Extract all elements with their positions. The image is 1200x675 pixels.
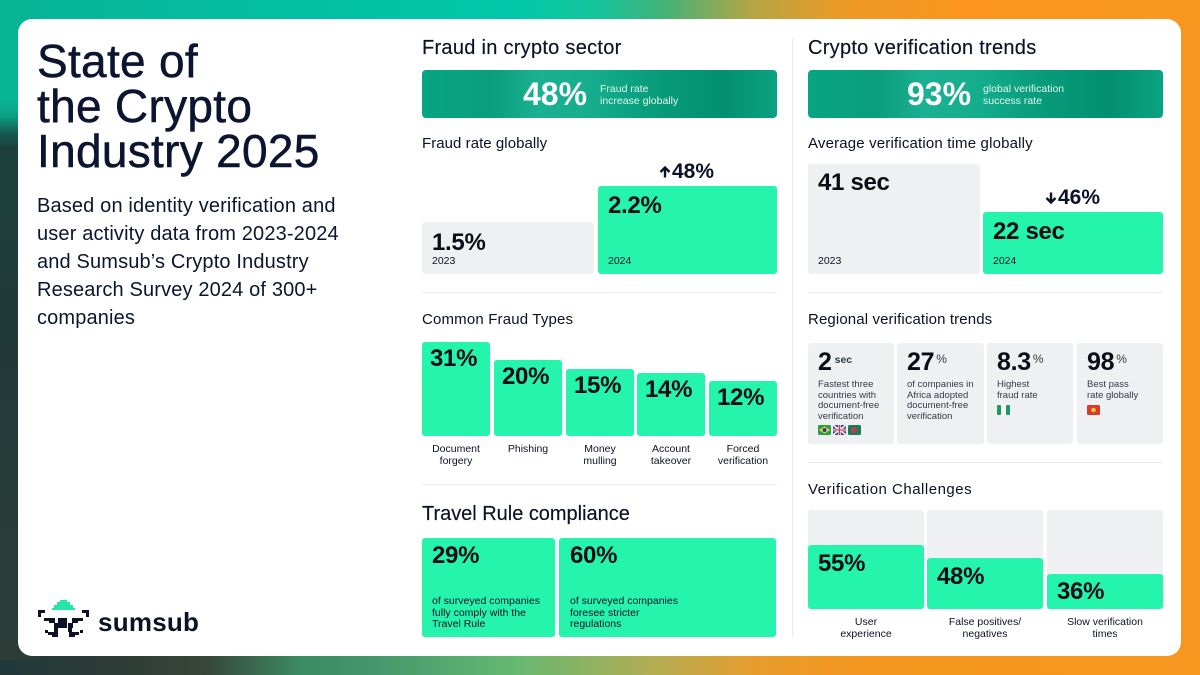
panel: crypto verification trends <box>808 37 1163 274</box>
subheading: Common Fraud Types <box>422 311 573 328</box>
description <box>570 595 678 630</box>
bar: 14% <box>637 373 705 436</box>
title <box>37 35 320 177</box>
value: 29% <box>432 542 479 569</box>
intro text: user activity data from 2023-2024 <box>37 223 339 245</box>
column: slow verification <box>1047 510 1163 609</box>
banner: 93% <box>808 70 1163 118</box>
description <box>997 379 1038 401</box>
fill: 55%: 55% <box>818 550 865 577</box>
description: foresee stricter <box>570 606 639 618</box>
description: verification <box>907 411 952 422</box>
fill: 48% <box>927 558 1043 609</box>
subheading: Fraud rate globally <box>422 135 547 152</box>
bar: 31% <box>422 342 490 436</box>
description: verification <box>818 411 863 422</box>
icon: flag of Vietnam <box>1087 405 1100 415</box>
year: 2023 <box>818 255 841 267</box>
banner value: 48% <box>523 76 587 112</box>
fill: 36%: 36% <box>1057 578 1104 605</box>
banner value: 93% <box>907 76 971 112</box>
label: takeover <box>651 455 691 467</box>
intro text: Based on identity verification and <box>37 195 336 217</box>
banner caption <box>600 83 678 107</box>
year: 2023 <box>432 255 455 267</box>
banner caption: increase globally <box>600 95 678 107</box>
label: forgery <box>440 455 472 467</box>
icon: flag of Nigeria <box>997 405 1010 415</box>
heading: Fraud in crypto sector <box>422 37 622 59</box>
value: 41 sec <box>818 169 890 196</box>
banner: 48% <box>422 70 777 118</box>
panel: common fraud types <box>422 311 777 467</box>
subheading: Average verification time globally <box>808 135 1033 152</box>
value: 2 sec <box>818 348 852 376</box>
description: rate globally <box>1087 390 1138 401</box>
banner caption: global verification <box>983 83 1064 95</box>
change: down 46%: 46% <box>1058 186 1100 209</box>
description <box>907 379 974 422</box>
label <box>718 443 768 467</box>
value: 27% <box>907 348 947 376</box>
description: Travel Rule <box>432 618 485 630</box>
description: Best pass <box>1087 379 1129 390</box>
label <box>583 443 617 467</box>
description: Fastest three <box>818 379 873 390</box>
value: 98% <box>1087 348 1127 376</box>
icon: flags of Brazil, UK, Bangladesh <box>818 425 861 435</box>
description: Africa adopted <box>907 390 968 401</box>
label <box>432 443 480 467</box>
icon: sumsub pixel mark <box>38 600 89 637</box>
banner caption: Fraud rate <box>600 83 648 95</box>
value: 22 sec <box>993 218 1065 245</box>
description: of surveyed companies <box>570 595 678 607</box>
year: 2024 <box>993 255 1016 267</box>
intro text: Research Survey 2024 of 300+ <box>37 279 318 301</box>
bar: 12% <box>709 381 777 436</box>
fill: 55% <box>808 545 924 609</box>
change: up 48%: 48% <box>672 160 714 183</box>
tile: 8.3% <box>987 343 1073 444</box>
value: 8.3% <box>997 348 1044 376</box>
description: document-free <box>907 400 968 411</box>
label: experience <box>840 628 892 640</box>
title: the Crypto <box>37 80 252 132</box>
description: countries with <box>818 390 876 401</box>
bar 2024 <box>983 212 1163 274</box>
bar: 14%: 14% <box>645 376 692 403</box>
intro text: and Sumsub’s Crypto Industry <box>37 251 309 273</box>
panel: travel rule compliance <box>422 503 776 637</box>
logo wordmark: sumsub <box>98 607 199 637</box>
tile: 2 sec <box>808 343 894 444</box>
bar: 15%: 15% <box>574 372 621 399</box>
title: State of <box>37 35 198 87</box>
value: 60% <box>570 542 617 569</box>
heading: Travel Rule compliance <box>422 503 630 525</box>
label: Slow verification <box>1067 616 1143 628</box>
label: Account <box>652 443 690 455</box>
title: Industry 2025 <box>37 125 320 177</box>
description <box>432 595 540 630</box>
description: of surveyed companies <box>432 595 540 607</box>
banner caption <box>983 83 1064 107</box>
label: mulling <box>583 455 617 467</box>
column: user experience <box>808 510 924 609</box>
tile: 27% <box>897 343 984 444</box>
description: of companies in <box>907 379 974 390</box>
fill: 36% <box>1047 574 1163 609</box>
value: 2.2% <box>608 192 662 219</box>
value: 1.5% <box>432 229 486 256</box>
label: Money <box>584 443 616 455</box>
label <box>651 443 691 467</box>
bar: 12%: 12% <box>717 384 764 411</box>
label: Phishing <box>508 443 548 455</box>
card: 29% <box>422 538 555 637</box>
bar 2023 <box>422 222 594 274</box>
label: False positives/ <box>949 616 1021 628</box>
column: false positives <box>927 510 1043 609</box>
label: negatives <box>963 628 1007 640</box>
bar: 20%: 20% <box>502 363 549 390</box>
bar 2024 <box>598 186 777 274</box>
panel: regional verification trends <box>808 311 1163 444</box>
label: times <box>1092 628 1118 640</box>
description <box>1087 379 1138 401</box>
panel: fraud in crypto sector <box>422 37 777 274</box>
description <box>818 379 879 422</box>
bar 2023 <box>808 164 980 274</box>
bar: 31%: 31% <box>430 345 477 372</box>
bar: 20% <box>494 360 562 436</box>
intro text: companies <box>37 307 135 329</box>
description: fraud rate <box>997 390 1038 401</box>
tile: 98% <box>1077 343 1163 444</box>
label <box>1067 616 1143 640</box>
subheading: Regional verification trends <box>808 311 992 328</box>
label: Forced <box>727 443 759 455</box>
description: fully comply with the <box>432 606 526 618</box>
intro text <box>37 195 339 329</box>
fill: 48%: 48% <box>937 563 984 590</box>
label: User <box>855 616 877 628</box>
subheading: Verification Challenges <box>808 481 972 498</box>
label <box>949 616 1022 640</box>
label <box>840 616 892 640</box>
label: Document <box>432 443 480 455</box>
year: 2024 <box>608 255 631 267</box>
heading: Crypto verification trends <box>808 37 1036 59</box>
description: document-free <box>818 400 879 411</box>
card: 60% <box>559 538 776 637</box>
description: regulations <box>570 618 621 630</box>
panel: verification challenges <box>808 481 1163 640</box>
label: verification <box>718 455 768 467</box>
banner caption: success rate <box>983 95 1042 107</box>
description: Highest <box>997 379 1029 390</box>
sumsub logo <box>38 600 199 637</box>
bar: 15% <box>566 369 634 436</box>
